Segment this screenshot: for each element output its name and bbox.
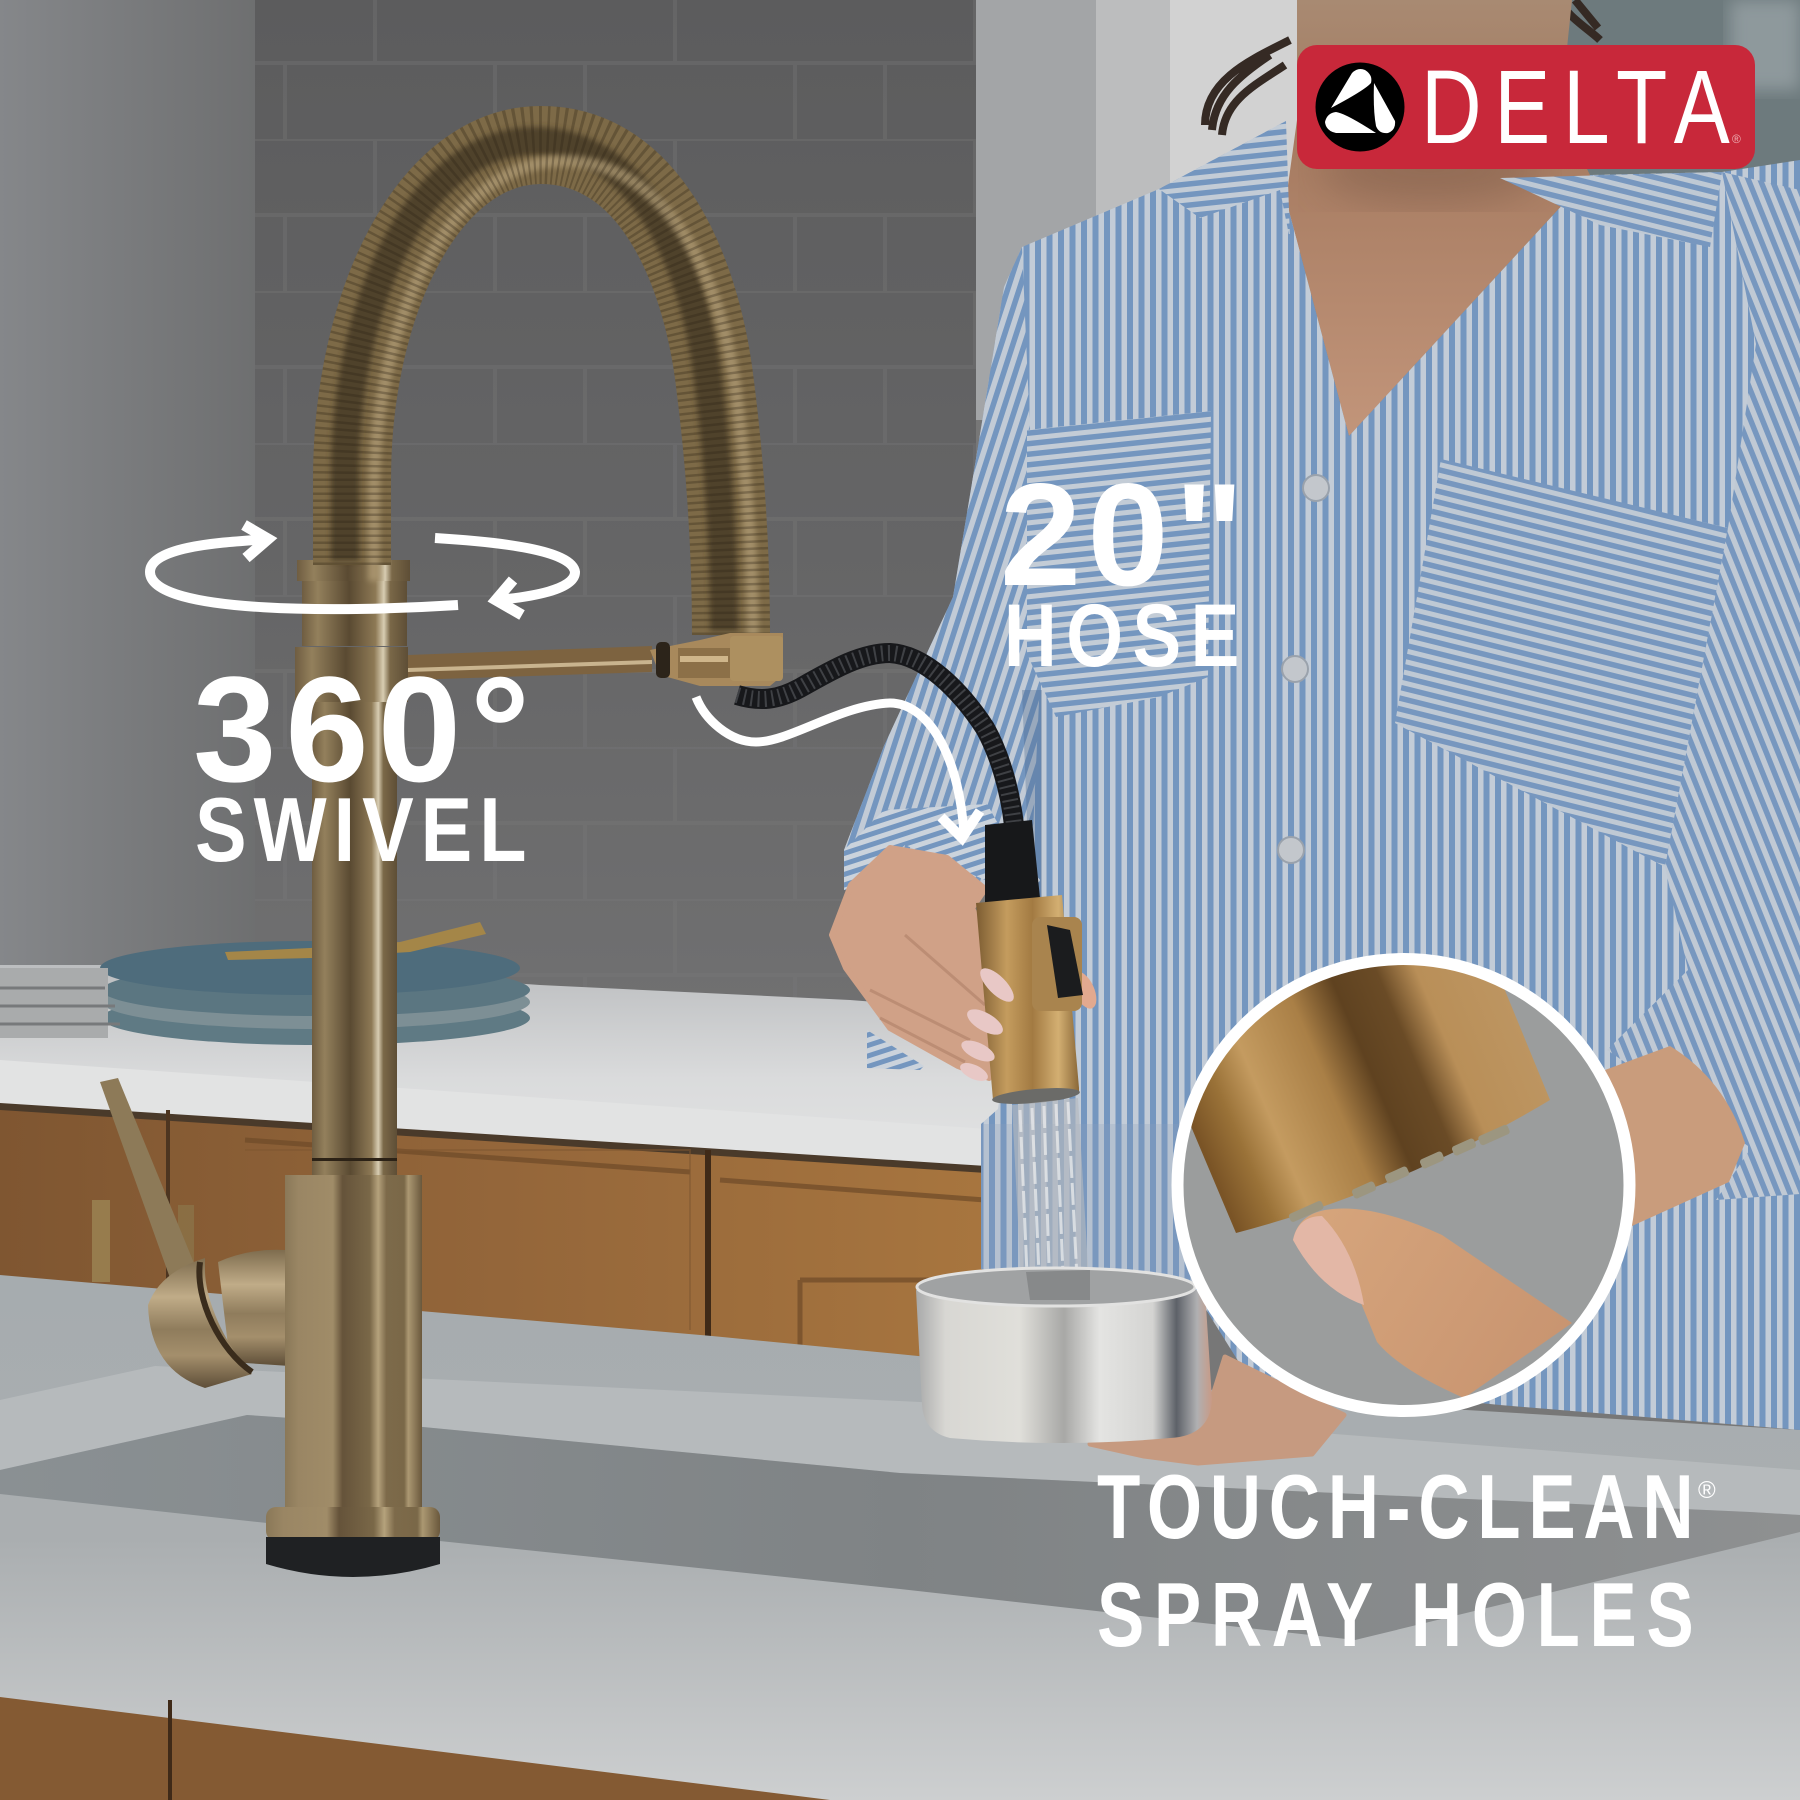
- window frame and wall: [976, 0, 1800, 420]
- cuff bottom: [867, 1030, 924, 1070]
- shirt shading: [981, 1124, 1200, 1300]
- lower cabinet: [0, 1697, 830, 1800]
- sink basin: [0, 1415, 1800, 1640]
- neck and chest: [1286, 0, 1590, 436]
- spray button: [1032, 917, 1083, 1011]
- base ring: [266, 1507, 440, 1541]
- back counter front edge: [0, 1060, 1002, 1172]
- hose: [737, 653, 1014, 825]
- 20 inch heading: 20": [1000, 453, 1244, 616]
- spray holes label: SPRAY HOLES: [1097, 1565, 1694, 1666]
- front counter: [0, 1275, 1800, 1800]
- swivel right arrowhead: [496, 580, 522, 615]
- lower cabinets: [0, 1103, 1002, 1358]
- registered mark: ®: [1698, 1477, 1716, 1504]
- horizontal arm: [408, 646, 652, 680]
- spout elbow: [650, 633, 783, 686]
- spray connector: [985, 820, 1040, 905]
- tile backsplash: [255, 0, 976, 1010]
- steel pot: [916, 1268, 1344, 1463]
- sleeve shadow: [1022, 690, 1042, 900]
- pot inner: [917, 1268, 1195, 1306]
- hand under pot: [1090, 1357, 1344, 1463]
- counter rim highlight: [0, 1366, 1800, 1515]
- callout: touch-clean close-up: [1178, 905, 1630, 1411]
- badge background: [1297, 45, 1755, 169]
- badge registered mark: ®: [1732, 132, 1741, 146]
- fingertip close-up: [1293, 1208, 1572, 1398]
- left wall: [0, 0, 256, 1000]
- column collars: [295, 560, 410, 702]
- shirt buttons: [1278, 475, 1329, 863]
- shirt body: [844, 121, 1800, 1430]
- stacked plates: [0, 922, 530, 1045]
- lever handle: [100, 1078, 196, 1278]
- collars: [1159, 121, 1722, 247]
- left cuff: [844, 804, 1040, 900]
- logo circle: [1316, 62, 1404, 152]
- swivel right arc: [435, 538, 575, 600]
- handle hub: [148, 1250, 292, 1388]
- Delta logo badge: [1297, 45, 1755, 169]
- right forearm: [1605, 1046, 1745, 1226]
- right pocket: [1395, 459, 1728, 867]
- text: touch-clean spray holes: [1097, 1457, 1716, 1666]
- column: [312, 690, 397, 1175]
- fingernails: [957, 963, 1019, 1085]
- fingernail close-up: [1293, 1216, 1364, 1305]
- Delta wordmark: DELTA: [1421, 49, 1730, 166]
- hair: [1205, 0, 1600, 135]
- spray head body: [976, 895, 1079, 1100]
- far fingertip: [1066, 968, 1102, 1012]
- 360 degree heading: 360°: [193, 645, 530, 813]
- water spray: [1012, 1098, 1090, 1300]
- icon: hose reach arrow: [696, 697, 980, 838]
- right sleeve: [1607, 172, 1800, 1200]
- water stream in pot: [1026, 1270, 1090, 1300]
- text: 20 inch hose: [1000, 453, 1244, 686]
- faucet body: [285, 1175, 422, 1515]
- logo petals: [1325, 69, 1395, 133]
- hand holding spray head: [832, 820, 1102, 1107]
- finger shadows: [870, 935, 985, 1062]
- back counter top: [0, 965, 1002, 1172]
- pot body: [916, 1290, 1212, 1443]
- hand: [832, 848, 1016, 1078]
- hose arrow line: [696, 697, 964, 835]
- swivel left arc: [150, 539, 458, 609]
- close-up background: [1178, 959, 1630, 1411]
- faucet: [100, 141, 1014, 1577]
- spray nozzles: [1288, 1124, 1511, 1223]
- touch-clean label: TOUCH-CLEAN: [1097, 1457, 1694, 1558]
- black base: [266, 1537, 440, 1577]
- hose arrowhead: [941, 811, 980, 838]
- left pocket: [1027, 411, 1211, 717]
- spray head face: [992, 1085, 1080, 1107]
- text: 360 swivel: [193, 645, 530, 880]
- icon: swivel rotation arrows: [150, 525, 575, 615]
- spray head close-up: [1191, 965, 1550, 1233]
- ribbed spout: [345, 141, 753, 651]
- chin shadow: [1320, 135, 1540, 205]
- swivel left arrowhead: [244, 525, 268, 558]
- swivel label: SWIVEL: [195, 779, 527, 880]
- woman: [844, 0, 1800, 1430]
- hose label: HOSE: [1004, 586, 1239, 686]
- left sleeve: [844, 247, 1040, 895]
- close-up ring: [1178, 959, 1630, 1411]
